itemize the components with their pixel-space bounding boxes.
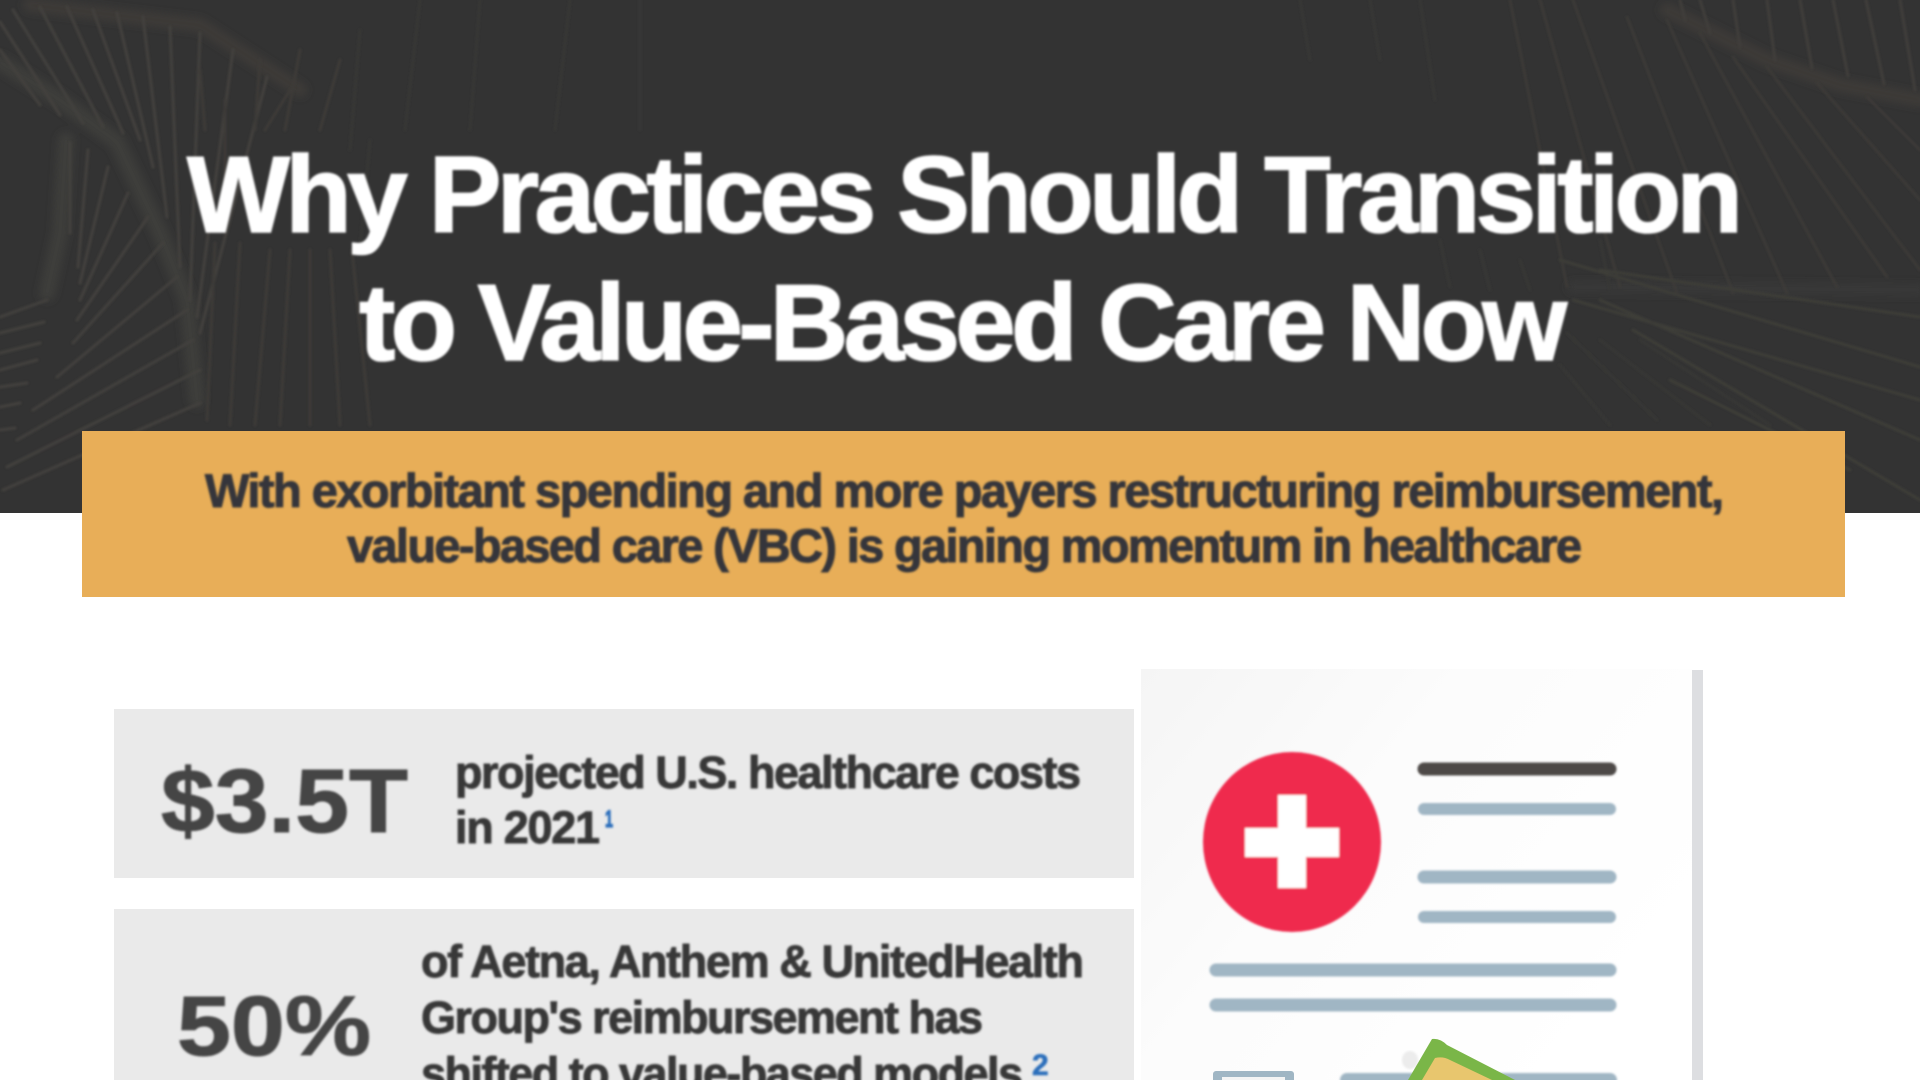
header background (0, 0, 1920, 513)
title: to Value-Based Care Now (359, 262, 1567, 384)
icon: green banknote (1402, 1039, 1515, 1080)
stat value: 50%: 50% (177, 979, 371, 1073)
document text lines (1216, 769, 1610, 1080)
subtitle banner: value-based care (VBC) is gaining momentum in healthcare (347, 519, 1582, 572)
illustration: medical document (1141, 669, 1703, 1080)
title (187, 134, 1743, 384)
stat description (455, 747, 1081, 853)
panel: value-based reimbursement stat (114, 909, 1134, 1080)
title: Why Practices Should Transition (187, 134, 1743, 256)
subtitle banner (82, 431, 1845, 597)
stat description: Group's reimbursement has (421, 992, 983, 1043)
stat value: $3.5T: $3.5T (161, 752, 408, 852)
stat description: 1 (605, 806, 613, 833)
stat description (421, 936, 1084, 1080)
panel: healthcare costs stat (114, 709, 1134, 878)
signature box (1213, 1071, 1294, 1080)
icon: red medical cross (1203, 752, 1381, 932)
stat description: projected U.S. healthcare costs (455, 747, 1081, 798)
stat description: in 2021 (455, 802, 600, 853)
stat description: of Aetna, Anthem & UnitedHealth (421, 936, 1084, 987)
subtitle banner: With exorbitant spending and more payers restructuring reimbursement, (205, 464, 1724, 517)
